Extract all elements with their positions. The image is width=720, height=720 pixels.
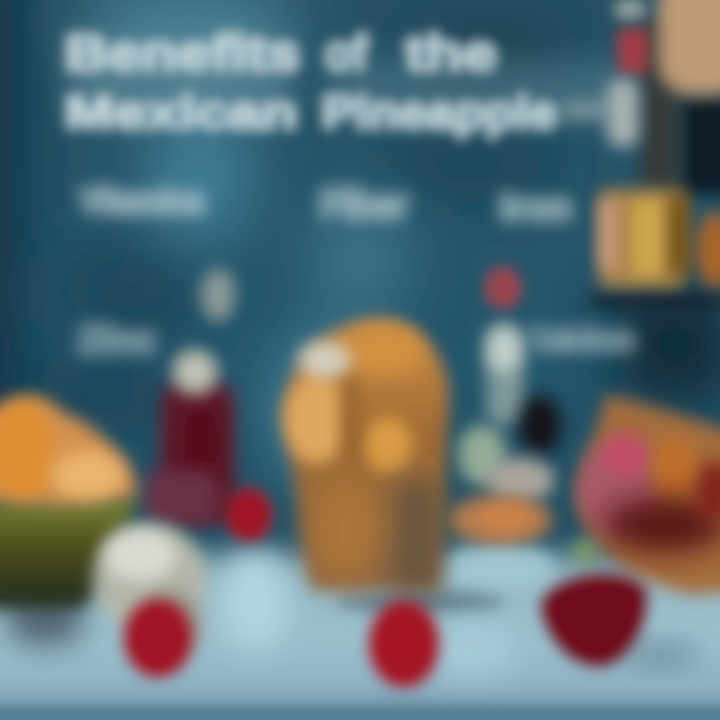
title end smudge xyxy=(562,100,610,120)
labels row two: Zinc xyxy=(78,319,156,360)
title xyxy=(65,25,557,138)
title: Pineapple xyxy=(322,86,557,138)
labels row one xyxy=(80,180,572,229)
right tart with berries xyxy=(573,395,720,595)
strawberry: back xyxy=(226,488,272,542)
centre bread xyxy=(284,320,448,590)
small pastry on plate xyxy=(448,495,552,545)
left bowl with orange food xyxy=(0,396,138,610)
strawberry: right xyxy=(540,574,648,667)
white ball xyxy=(94,524,206,661)
title: Mexican xyxy=(65,86,297,138)
labels row one: Fiber xyxy=(320,183,408,227)
left red bottle xyxy=(145,269,235,525)
title: the xyxy=(405,25,497,81)
title: Benefits xyxy=(65,25,300,81)
labels row two: Calcium xyxy=(530,321,635,357)
labels row one: Iron xyxy=(500,187,572,229)
labels row two xyxy=(78,319,635,360)
table surface xyxy=(0,544,720,720)
top bottle xyxy=(608,0,648,146)
title haze xyxy=(70,40,630,120)
top right shelf with food xyxy=(590,0,720,307)
labels row one: Vitamins xyxy=(80,180,205,221)
title: of xyxy=(325,25,367,81)
strawberry: left xyxy=(123,598,193,678)
strawberry: centre xyxy=(368,600,440,688)
right bottle xyxy=(458,267,562,502)
